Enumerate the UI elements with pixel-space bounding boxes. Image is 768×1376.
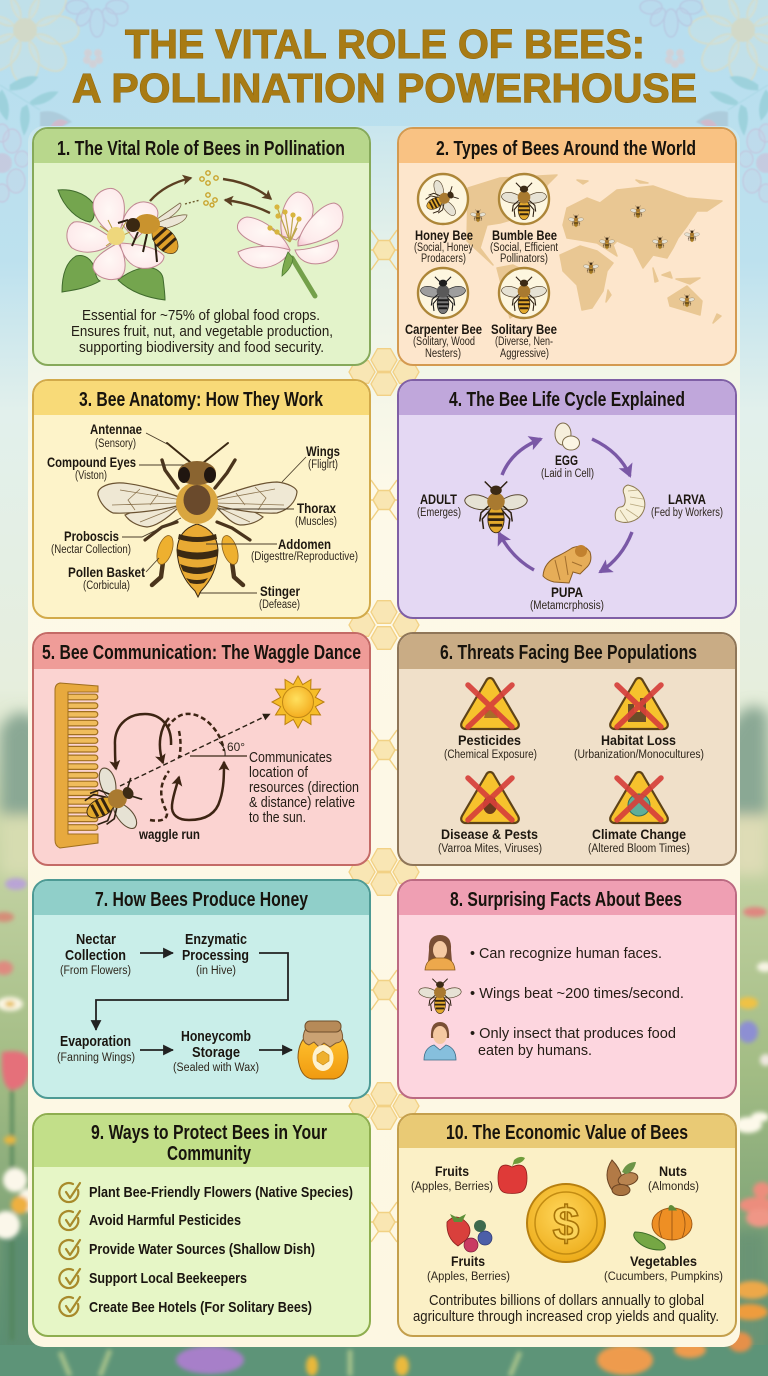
carpenter bee: Nesters) <box>425 348 461 360</box>
title <box>72 21 697 111</box>
fact 3 text: • Only insect that produces food <box>470 1025 676 1042</box>
threat: climate change: Climate Change <box>592 826 686 842</box>
pupa: PUPA <box>551 584 583 600</box>
vegetables: Vegetables <box>630 1253 697 1269</box>
checklist: Avoid Harmful Pesticides <box>89 1212 241 1229</box>
step: evaporation: Evaporation <box>60 1033 131 1050</box>
fruits: apple <box>411 1157 527 1194</box>
economic summary <box>413 1292 719 1325</box>
bumble bee: Pollinators) <box>500 253 548 265</box>
bumble bee: Bumble Bee <box>492 227 557 243</box>
step: nectar collection: Nectar <box>76 931 116 948</box>
nuts: Nuts <box>659 1163 687 1179</box>
egg: EGG <box>555 452 578 468</box>
fruits: berries: Fruits <box>451 1253 485 1269</box>
dance loops <box>115 714 224 821</box>
small bee markers on map <box>470 206 700 307</box>
bumble bee: (Social, Efficient <box>490 242 559 254</box>
heading 9: 9. Ways to Protect Bees in Your <box>91 1121 327 1144</box>
vegetables <box>604 1206 723 1283</box>
solitary bee: Aggressive) <box>500 348 549 360</box>
panel 8: surprising facts <box>398 880 736 1098</box>
adult <box>417 482 527 533</box>
illustration: bee pollinating flowers <box>58 171 343 300</box>
anatomy labels: (Fliglrt) <box>308 459 338 471</box>
pointer lines <box>122 433 306 593</box>
panel 4: life cycle <box>398 380 736 618</box>
description text <box>71 307 333 356</box>
anatomy labels: (Sensory) <box>95 438 136 450</box>
larva: (Fed by Workers) <box>651 507 723 519</box>
flow arrows <box>96 953 292 1050</box>
solitary bee: (Diverse, Nen- <box>495 336 553 348</box>
checklist: Provide Water Sources (Shallow Dish) <box>89 1241 315 1258</box>
panel 6: threats <box>398 633 736 865</box>
larva: LARVA <box>668 491 706 507</box>
bee on left flower <box>118 203 187 262</box>
heading 10: 10. The Economic Value of Bees <box>446 1121 688 1144</box>
anatomy labels: (Corbicula) <box>83 580 130 592</box>
larva <box>615 485 723 522</box>
threat: climate change <box>588 772 690 855</box>
threat: habitat loss: Habitat Loss <box>601 732 676 748</box>
fact 2 text: • Wings beat ~200 times/second. <box>470 985 684 1002</box>
step: evaporation: (Fanning Wings) <box>57 1052 135 1064</box>
anatomy labels: Thorax <box>297 500 336 516</box>
cycle arrows <box>499 439 632 572</box>
step: nectar collection: (From Flowers) <box>60 965 131 977</box>
step: nectar collection: Collection <box>65 947 126 964</box>
heading 6: 6. Threats Facing Bee Populations <box>440 641 697 664</box>
anatomy labels: (Defease) <box>259 599 300 611</box>
waggle description: resources (direction <box>249 779 359 796</box>
title: THE VITAL ROLE OF BEES: <box>125 21 645 67</box>
honey jar <box>298 1021 348 1079</box>
pupa: (Metamcrphosis) <box>530 600 604 612</box>
heading 7: 7. How Bees Produce Honey <box>95 888 308 911</box>
title: A POLLINATION POWERHOUSE <box>72 65 697 111</box>
step: honeycomb storage <box>173 1028 259 1074</box>
egg: (Laid in Cell) <box>541 468 594 480</box>
carpenter bee: (Solitary, Wood <box>413 336 475 348</box>
pupa <box>530 545 604 612</box>
heading 9 <box>91 1121 327 1165</box>
dancing bee <box>72 759 152 844</box>
waggle description: Communicates <box>249 749 332 766</box>
threat: habitat loss <box>574 678 704 761</box>
step: enzymatic processing <box>182 931 249 977</box>
fact 3 text: eaten by humans. <box>478 1042 592 1059</box>
honey bee: (Social, Honey <box>414 242 473 254</box>
heading 3: 3. Bee Anatomy: How They Work <box>79 388 323 411</box>
bumble bee <box>490 174 559 265</box>
solitary bee <box>491 268 557 360</box>
threat: disease and pests: (Varroa Mites, Viruses) <box>438 843 542 855</box>
fruits: berries <box>427 1214 510 1283</box>
egg <box>541 423 594 480</box>
anatomy labels: Compound Eyes <box>47 454 136 470</box>
threat: pesticides: Pesticides <box>458 732 521 748</box>
step: enzymatic processing: (in Hive) <box>196 965 236 977</box>
honey bee <box>414 174 473 265</box>
threat: climate change: (Altered Bloom Times) <box>588 843 690 855</box>
icon: coin <box>527 1184 605 1262</box>
carpenter bee: Carpenter Bee <box>405 321 482 337</box>
anatomy labels: Wings <box>306 443 340 459</box>
panel 2: types of bees <box>398 128 736 365</box>
anatomy labels: (Nectar Collection) <box>51 544 131 556</box>
panel 10: economic value <box>398 1114 736 1336</box>
waggle description: & distance) relative <box>249 794 355 811</box>
step: evaporation <box>57 1033 135 1064</box>
fruits: apple: Fruits <box>435 1163 469 1179</box>
anatomy labels: (Muscles) <box>295 516 337 528</box>
anatomy labels <box>47 421 358 611</box>
waggle description <box>249 749 359 826</box>
anatomy labels: Antennae <box>90 421 142 437</box>
direction line and angle <box>120 714 270 786</box>
adult: ADULT <box>420 491 457 507</box>
icon: woman <box>425 935 455 970</box>
panel 9: ways to protect <box>33 1114 370 1336</box>
anatomy labels: Stinger <box>260 583 300 599</box>
anatomy labels: Addomen <box>278 536 331 552</box>
threat: habitat loss: (Urbanization/Monocultures) <box>574 749 704 761</box>
step: enzymatic processing: Processing <box>182 947 249 964</box>
checklist <box>59 1183 353 1316</box>
heading 4: 4. The Bee Life Cycle Explained <box>449 388 685 411</box>
economic summary: Contributes billions of dollars annually to global <box>429 1292 704 1309</box>
description text: Essential for ~75% of global food crops. <box>82 307 320 324</box>
threat: disease and pests <box>438 772 542 855</box>
anatomy labels: Pollen Basket <box>68 564 145 580</box>
threat: pesticides <box>444 678 537 761</box>
panel 1: role in pollination <box>33 128 370 365</box>
honeycomb decoration between panels <box>349 230 419 1242</box>
vegetables: (Cucumbers, Pumpkins) <box>604 1271 723 1283</box>
step: honeycomb storage: (Sealed with Wax) <box>173 1062 259 1074</box>
threat: pesticides: (Chemical Exposure) <box>444 749 537 761</box>
checklist: Support Local Beekeepers <box>89 1270 247 1287</box>
anatomy labels: Proboscis <box>64 528 119 544</box>
step: honeycomb storage: Storage <box>192 1044 240 1061</box>
sun <box>272 676 324 728</box>
icon: bee <box>419 979 461 1014</box>
panel 5: waggle dance <box>33 633 370 865</box>
checklist: Plant Bee-Friendly Flowers (Native Species) <box>89 1184 353 1201</box>
panel 3: anatomy <box>33 380 370 618</box>
icon: coin: $ <box>553 1198 580 1251</box>
solitary bee: Solitary Bee <box>491 321 557 337</box>
panel 7: honey production <box>33 880 370 1098</box>
waggle description: to the sun. <box>249 809 306 826</box>
waggle description: location of <box>249 764 309 781</box>
anatomy labels: (Digesttre/Reproductive) <box>251 551 358 563</box>
fact 1 text: • Can recognize human faces. <box>470 945 662 962</box>
anatomy labels: (Viston) <box>75 470 107 482</box>
carpenter bee <box>405 268 482 360</box>
heading 1: 1. The Vital Role of Bees in Pollination <box>57 137 345 160</box>
waggle run label: waggle run <box>138 826 200 842</box>
heading 9: Community <box>167 1142 251 1165</box>
heading 5: 5. Bee Communication: The Waggle Dance <box>42 641 361 664</box>
honey bee: Prodacers) <box>421 253 466 265</box>
nuts <box>607 1160 699 1196</box>
description text: Ensures fruit, nut, and vegetable production, <box>71 323 333 340</box>
checklist: Create Bee Hotels (For Solitary Bees) <box>89 1299 312 1316</box>
fruits: apple: (Apples, Berries) <box>411 1181 493 1193</box>
honeycomb comb <box>55 683 98 848</box>
large bee illustration <box>98 443 297 597</box>
step: nectar collection <box>60 931 131 977</box>
heading 2: 2. Types of Bees Around the World <box>436 137 696 160</box>
threat: disease and pests: Disease & Pests <box>441 826 538 842</box>
fruits: berries: (Apples, Berries) <box>427 1271 510 1283</box>
economic summary: agriculture through increased crop yields and quality. <box>413 1308 719 1325</box>
step: honeycomb storage: Honeycomb <box>181 1028 251 1045</box>
step: enzymatic processing: Enzymatic <box>185 931 247 948</box>
heading 8: 8. Surprising Facts About Bees <box>450 888 682 911</box>
world map <box>467 175 722 323</box>
icon: man <box>424 1022 456 1060</box>
description text: supporting biodiversity and food security. <box>79 339 324 356</box>
honey bee: Honey Bee <box>415 227 473 243</box>
nuts: (Almonds) <box>648 1181 699 1193</box>
direction line and angle: 60° <box>227 742 245 754</box>
adult: (Emerges) <box>417 507 461 519</box>
fact 3 text <box>470 1025 676 1059</box>
